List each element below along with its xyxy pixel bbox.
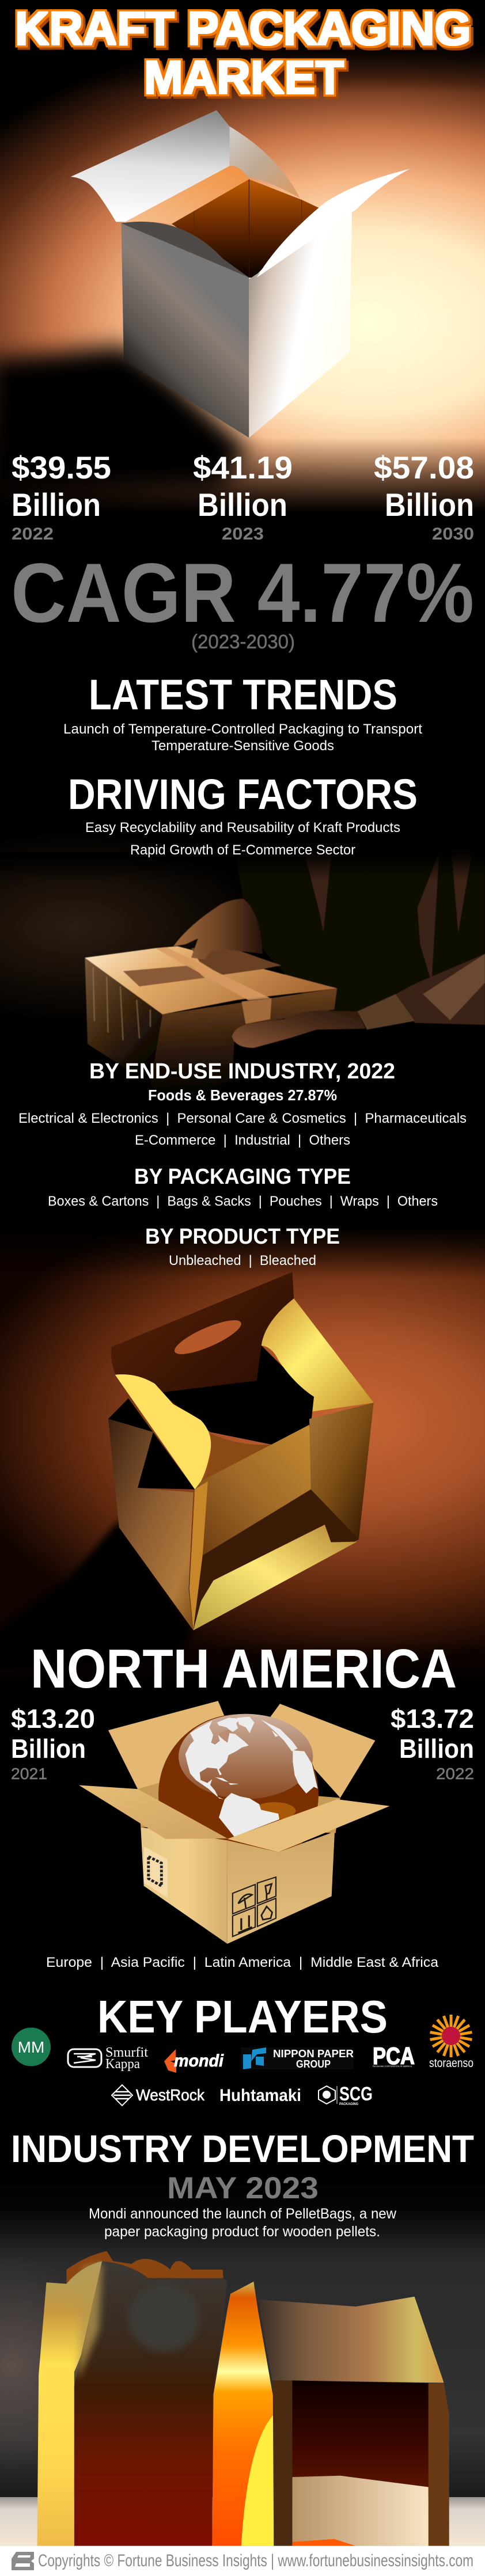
photo: parcel handover [0,829,485,1117]
box front [150,989,337,1110]
gusset highlight [241,2415,274,2546]
box interior [172,179,321,278]
illustration: kraft carrier bag [108,1272,374,1631]
stat: north america 2022: 2022 [436,1765,474,1783]
logo: SCG Packaging: SCG [339,2083,373,2105]
latest trends text: Launch of Temperature-Controlled Packaging to Transport [63,721,422,737]
stat: north america 2021 [11,1704,95,1783]
heading: north america: NORTH AMERICA [31,1638,457,1700]
back left flap [70,110,229,222]
end-use list [18,1111,467,1148]
heading: by end-use industry: BY END-USE INDUSTRY, 2022 [89,1059,395,1084]
jacket body [235,852,485,1012]
front right face [249,211,352,438]
right bag lit panel [292,2476,429,2546]
date: MAY 2023 [167,2171,319,2205]
stat: 2022 market size: $39.55 [12,450,111,485]
handle hole [170,1314,245,1361]
QR label [144,1846,168,1898]
logo: Nippon Paper Group: NIPPON PAPER [273,2048,354,2060]
left bag shadow dip [128,2284,199,2352]
lower hand [232,1010,366,1048]
stat: north america 2022: Billion [399,1734,474,1764]
logo: Stora Enso: storaenso [429,2057,473,2070]
heading: driving factors: DRIVING FACTORS [68,770,418,818]
bag floor [194,1490,359,1631]
jacket folds [304,852,472,983]
handling symbols [233,1877,276,1936]
stat: 2030 market size: $57.08 [374,450,474,485]
stat: 2022 market size: 2022 [12,525,54,544]
illustration: paper bags [37,2251,449,2546]
stat: north america 2021: $13.20 [11,1704,95,1734]
lit left flap [115,1374,211,1490]
right bag right strip [429,2383,449,2546]
Hudson Bay [219,1729,234,1742]
logo: SCG Packaging [319,2083,373,2106]
lit right flap [262,1298,374,1412]
latest trends text [63,721,422,754]
stat: 2030 market size [374,450,474,544]
front left face [122,223,249,438]
lit floor strip [194,1525,357,1631]
centre gusset [212,2282,274,2546]
stat: north america 2022 [391,1704,474,1783]
latest trends text: Temperature-Sensitive Goods [151,738,334,754]
sleeve [396,954,485,1025]
product type list: Unbleached | Bleached [169,1253,316,1268]
box side [85,958,162,1084]
globe shine [179,1714,313,1799]
other regions list: Europe | Asia Pacific | Latin America | Middle East & Africa [46,1955,439,1970]
logo: Smurfit Kappa: Kappa [105,2057,140,2072]
front panel [195,1424,311,1556]
box top [85,946,337,1015]
stat: 2023 market size: Billion [198,487,287,523]
shipping label [123,966,205,986]
parcel tape [156,947,270,1000]
title [15,2,471,104]
logo: mondi: mondi [174,2051,224,2070]
leading segment: Foods & Beverages 27.87% [148,1086,337,1104]
driving factors text [85,820,400,858]
heading: by product type: BY PRODUCT TYPE [145,1225,340,1249]
box left face [141,1827,228,1944]
bag photo background [0,1226,485,1687]
logo: Smurfit Kappa: Smurfit [105,2045,148,2060]
left bag handle [66,2251,223,2284]
orange base [292,2539,356,2546]
heading: latest trends: LATEST TRENDS [89,671,397,719]
logo: Smurfit Kappa [68,2045,148,2072]
logo: WestRock: WestRock [136,2086,205,2104]
front left flap [79,1785,228,1839]
logo: PCA: PCA [373,2042,415,2069]
ocean glow [253,1802,295,1819]
shaded area behind hand [191,948,281,975]
logo: Nippon Paper Group [241,2047,354,2070]
illustration: globe in cardboard box [79,1701,390,1944]
stat: 2022 market size: Billion [12,487,101,523]
left black interior [108,1399,195,1490]
back right flap [229,126,300,198]
box body and front flaps [79,1785,390,1944]
globe [158,1714,319,1875]
logo: mondi [164,2049,224,2073]
stat: 2030 market size: 2030 [432,525,474,544]
logo: Nippon Paper Group: GROUP [296,2058,331,2070]
driving factors text: Easy Recyclability and Reusability of Kraft Products [85,820,400,835]
upper hand [173,899,263,960]
stat: north america 2021: 2021 [11,1765,47,1783]
heading: by packaging type: BY PACKAGING TYPE [134,1165,351,1189]
development text [89,2206,397,2240]
logo: Stora Enso [429,2015,473,2070]
packaging type list: Boxes & Cartons | Bags & Sacks | Pouches | Wraps | Others [48,1194,438,1209]
logo: MM [12,2028,51,2066]
title: KRAFT PACKAGING [15,2,471,55]
stat: 2023 market size [193,450,293,544]
logo: WestRock [112,2085,205,2106]
logo: MM: MM [18,2038,44,2056]
logo: Huhtamaki: Huhtamaki [219,2086,301,2105]
cuff [358,994,415,1029]
front corner strip [190,1481,208,1631]
stat: 2023 market size: $41.19 [193,450,293,485]
inner ledge [124,165,249,224]
right bag left strip [273,2380,292,2546]
back flaps and inner wall [108,1701,375,1833]
inner back strip [204,1434,278,1480]
logo: PCA: PACKAGING CORPORATION OF AMERICA [373,2065,412,2068]
left bag highlight [77,2264,102,2380]
stat: 2023 market size: 2023 [222,525,264,544]
left side panel [108,1419,194,1631]
CAGR period: (2023-2030) [191,631,295,653]
development text: Mondi announced the launch of PelletBags, a new [89,2206,397,2222]
front right flap [228,1799,390,1852]
footer logo [12,2552,34,2570]
development photo background [0,2176,485,2546]
right side panel [309,1403,374,1539]
box right face [228,1832,335,1944]
stat: 2022 market size [12,450,111,544]
end-use list: Electrical & Electronics | Personal Care & Cosmetics | Pharmaceuticals [18,1111,467,1126]
continents [185,1717,318,1837]
inner dark [161,1346,314,1445]
side streaks [93,967,150,1040]
right bag centre dark panel [292,2380,429,2487]
stat: 2030 market size: Billion [385,487,474,523]
stat: north america 2021: Billion [11,1734,86,1764]
illustration: open white carton box [70,110,410,438]
logo: SCG Packaging: PACKAGING [339,2103,358,2106]
driving factors text: Rapid Growth of E-Commerce Sector [130,842,355,858]
stat: north america 2022: $13.72 [391,1704,474,1734]
back panel with handle [111,1272,309,1444]
footer [0,2546,485,2576]
heading: key players: KEY PLAYERS [97,1991,388,2042]
right flap [257,169,410,278]
hero background glow [0,40,485,524]
title: MARKET [144,52,344,104]
right bag top [258,2297,444,2383]
left bag gusset [37,2261,102,2546]
development text: paper packaging product for wooden pellets. [104,2224,380,2240]
front left flap [122,222,249,278]
left bag front [74,2261,228,2546]
end-use list: E-Commerce | Industrial | Others [135,1133,350,1148]
